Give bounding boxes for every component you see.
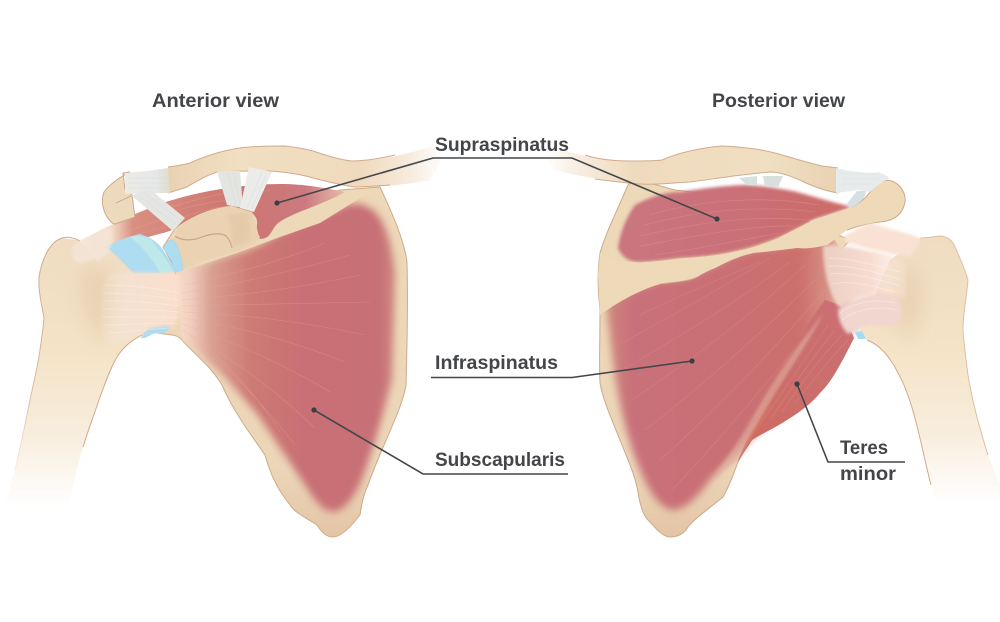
supraspinatus tendon anterior: [72, 228, 111, 263]
humerus posterior: [860, 236, 1000, 515]
supraspinatus muscle anterior: [80, 184, 345, 262]
ligaments posterior: [739, 168, 889, 207]
heading: posterior view: Posterior view: [712, 90, 846, 112]
label: teres minor: [794, 381, 905, 485]
panel: anterior view shoulder: [1, 146, 445, 537]
clavicle posterior: [545, 146, 838, 193]
label: teres minor: Teres: [840, 437, 888, 459]
scapula anterior: [158, 187, 407, 537]
pale border of teres minor: [712, 312, 824, 478]
teres minor fibres: [750, 318, 848, 432]
glenoid joint blue: [106, 234, 183, 338]
label: supraspinatus: Supraspinatus: [435, 134, 569, 156]
label: infraspinatus: [431, 352, 695, 378]
label: infraspinatus: Infraspinatus: [435, 352, 558, 374]
teres minor muscle: [737, 300, 854, 463]
joint blue posterior: [855, 331, 866, 339]
supraspinatus muscle posterior: [618, 185, 852, 262]
tendons posterior: [823, 223, 920, 334]
subscapularis tendon: [99, 272, 179, 345]
subscapularis muscle: [172, 204, 395, 512]
heading: anterior view: Anterior view: [152, 90, 280, 112]
clavicle anterior: [168, 146, 445, 193]
scapular spine and acromion: [598, 180, 905, 315]
subscapularis fibres: [182, 243, 370, 445]
label: supraspinatus: [274, 134, 720, 222]
ligaments anterior: [125, 167, 272, 231]
panel: posterior view shoulder: [545, 146, 1000, 537]
acromion and coracoid shading: [102, 172, 260, 272]
infraspinatus muscle: [606, 236, 860, 510]
scapula posterior: [598, 179, 850, 537]
supraspinatus fibres posterior: [640, 200, 820, 255]
supraspinatus fibres anterior: [110, 191, 270, 245]
infraspinatus fibres: [618, 258, 830, 490]
label: subscapularis: Subscapularis: [435, 449, 565, 471]
humerus anterior: [1, 238, 182, 518]
label: subscapularis: [311, 407, 568, 474]
label: teres minor: minor: [840, 463, 896, 485]
